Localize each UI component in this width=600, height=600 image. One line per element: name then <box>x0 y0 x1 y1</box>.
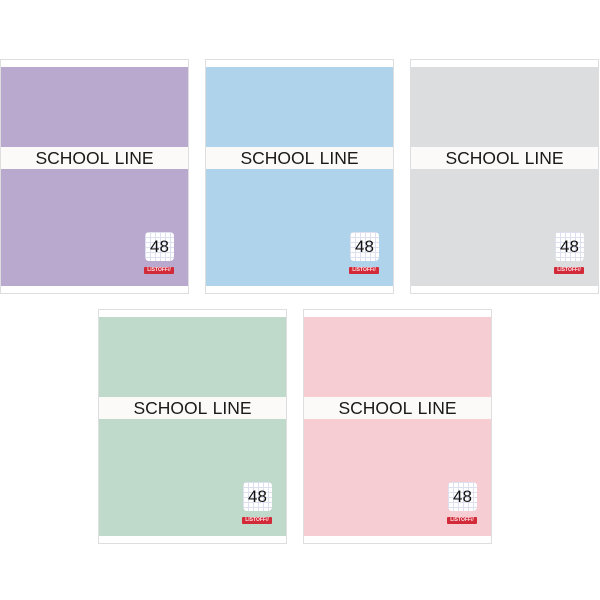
page count badge <box>448 482 477 511</box>
pink cover <box>304 317 491 536</box>
notebook: pink <box>303 309 492 544</box>
title: SCHOOL LINE <box>240 148 359 168</box>
green cover <box>99 317 286 536</box>
gray cover <box>411 67 598 286</box>
page count badge <box>555 232 584 261</box>
title: SCHOOL LINE <box>445 148 564 168</box>
white band <box>206 147 393 169</box>
page count badge: 48 <box>248 487 267 506</box>
white band <box>304 397 491 419</box>
page count badge: 48 <box>355 237 374 256</box>
purple cover <box>1 67 188 286</box>
brand label: LISTOFF// <box>147 267 171 273</box>
title: SCHOOL LINE <box>35 148 154 168</box>
notebook: green <box>98 309 287 544</box>
page count badge: 48 <box>453 487 472 506</box>
notebook: purple <box>0 59 189 294</box>
page count badge <box>145 232 174 261</box>
notebook: blue <box>205 59 394 294</box>
title: SCHOOL LINE <box>133 398 252 418</box>
page count badge: 48 <box>560 237 579 256</box>
notebook: gray <box>410 59 599 294</box>
white band <box>1 147 188 169</box>
page count badge <box>243 482 272 511</box>
page count badge <box>350 232 379 261</box>
white band <box>411 147 598 169</box>
blue cover <box>206 67 393 286</box>
brand label: LISTOFF// <box>245 517 269 523</box>
brand label: LISTOFF// <box>450 517 474 523</box>
page count badge: 48 <box>150 237 169 256</box>
title: SCHOOL LINE <box>338 398 457 418</box>
white band <box>99 397 286 419</box>
brand label: LISTOFF// <box>557 267 581 273</box>
brand label: LISTOFF// <box>352 267 376 273</box>
